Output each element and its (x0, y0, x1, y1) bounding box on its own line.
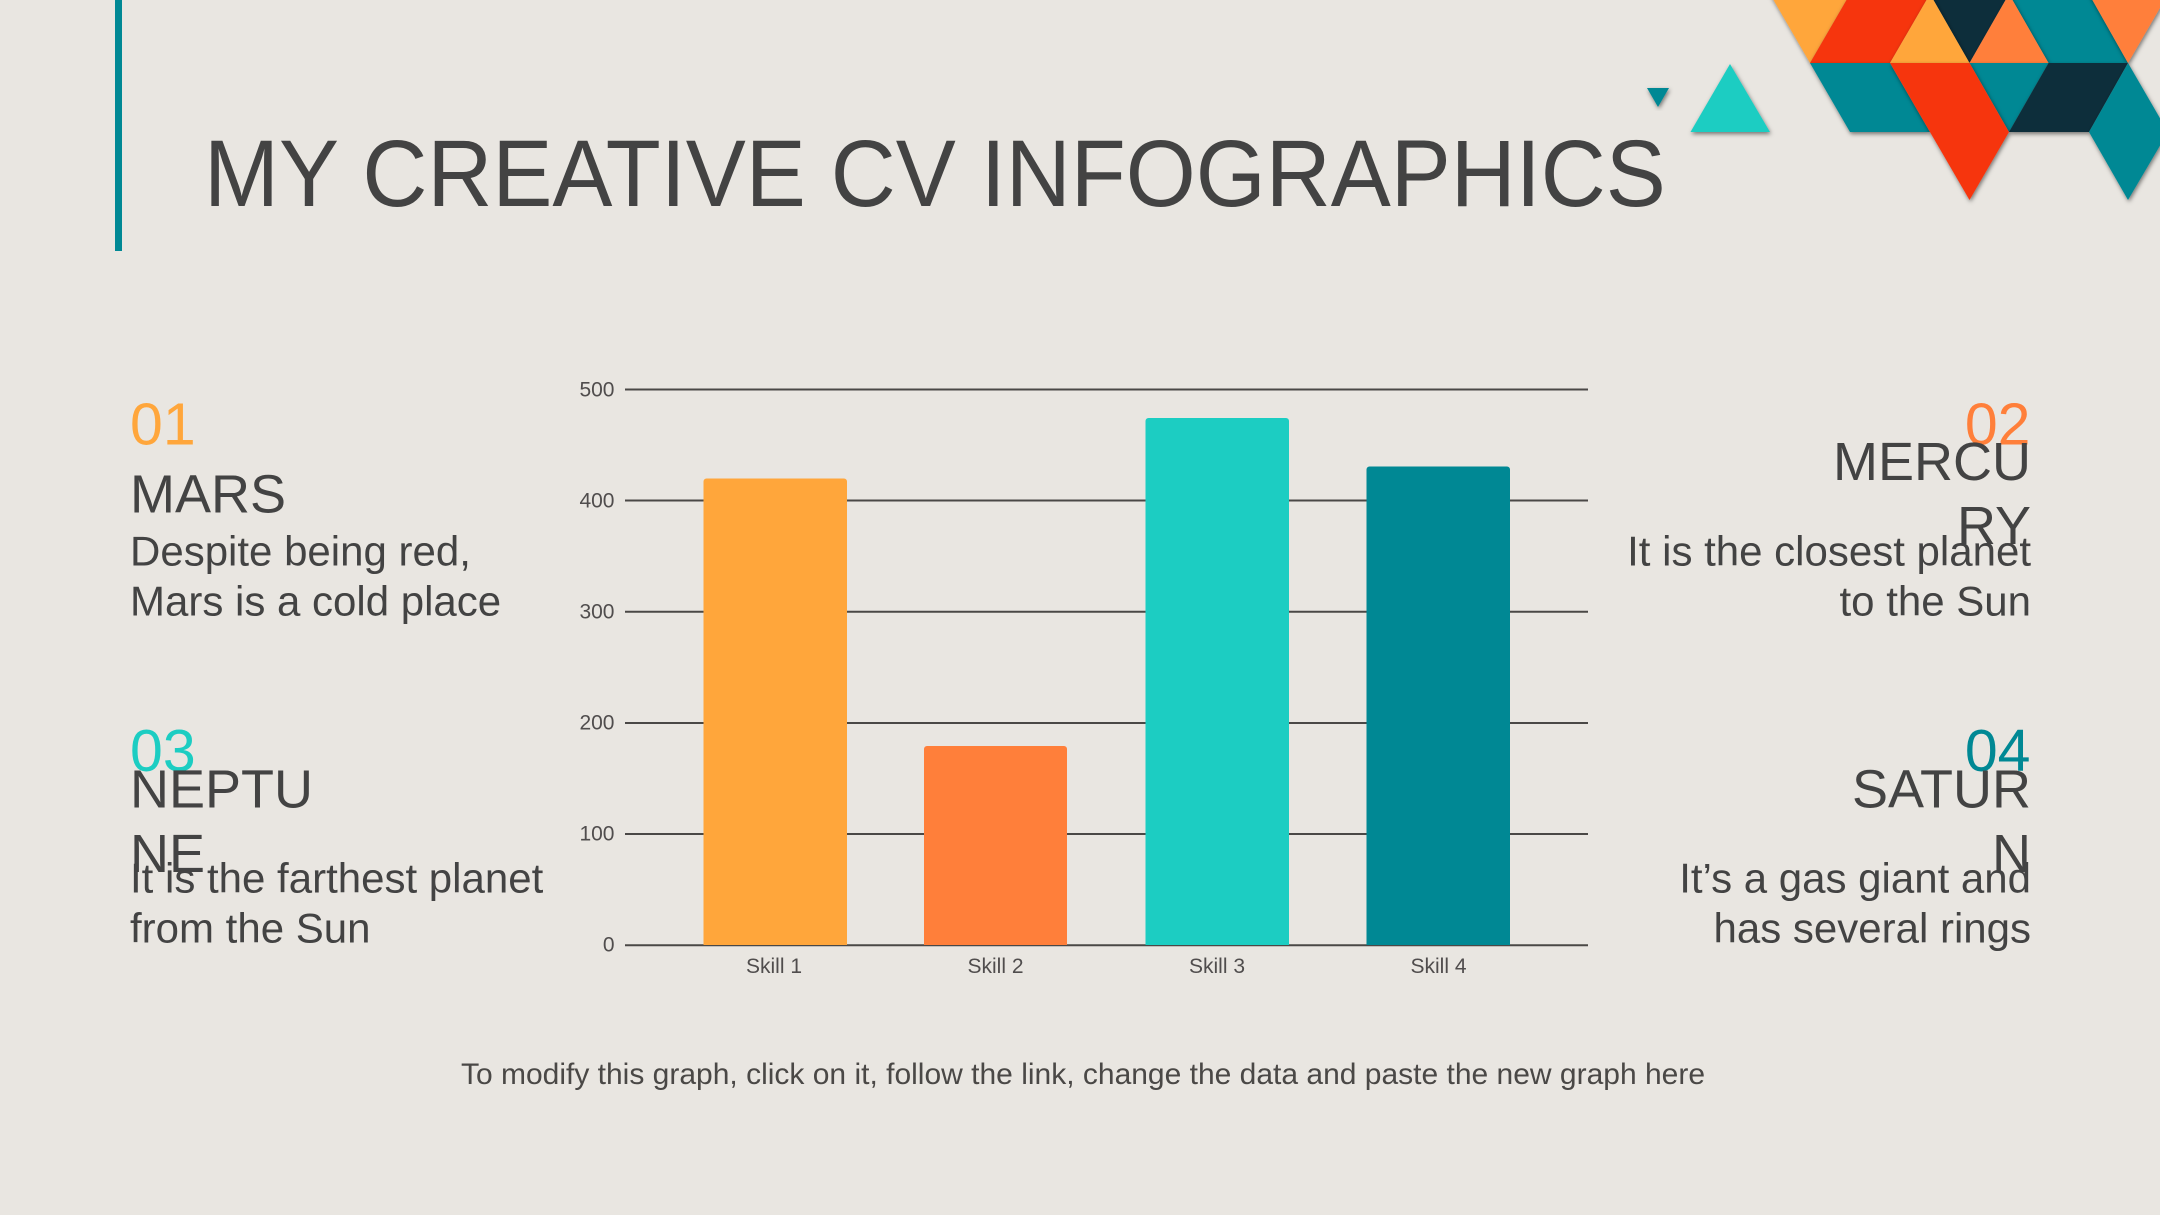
caption: To modify this graph, click on it, follow the link, change the data and paste the new graph here (461, 1058, 1705, 1091)
bar: Skill 4 (1366, 466, 1510, 945)
x axis labels: Skill 2 (967, 955, 1024, 978)
description Neptune: from the Sun (130, 904, 370, 952)
number 01: 01 (130, 392, 196, 458)
icon: cyan triangle (1690, 64, 1770, 132)
bar chart (579, 378, 1588, 978)
y axis labels: 100 (579, 822, 614, 846)
number 02: 02 (1965, 392, 2030, 458)
bar: Skill 3 (1146, 418, 1289, 945)
y axis labels: 300 (579, 600, 614, 624)
bar: Skill 1 (704, 478, 847, 945)
y axis labels: 200 (579, 712, 614, 734)
heading Mercury: MERCU (1833, 432, 2031, 492)
heading Neptune: NE (130, 824, 205, 884)
accent bar (115, 0, 122, 251)
icon: small teal triangle (1647, 88, 1669, 107)
x axis labels: Skill 3 (1189, 955, 1245, 978)
description Saturn: It’s a gas giant and (1679, 854, 2031, 902)
panel: 01 Mars (130, 392, 501, 624)
description Mercury: to the Sun (1840, 578, 2031, 624)
x axis labels: Skill 1 (746, 955, 802, 978)
heading Mercury: RY (1957, 496, 2031, 556)
x axis labels (746, 955, 1467, 978)
triangle mosaic (1770, 0, 2160, 200)
panel: 02 Mercury (1627, 392, 2031, 624)
x axis labels: Skill 4 (1410, 955, 1467, 978)
y axis labels (579, 378, 614, 956)
title: MY CREATIVE CV INFOGRAPHICS (204, 120, 1666, 226)
y axis labels: 500 (579, 378, 614, 402)
description Mars: Mars is a cold place (130, 578, 501, 624)
description Mercury: It is the closest planet (1627, 528, 2031, 574)
y axis labels: 400 (579, 490, 614, 512)
description Saturn: has several rings (1714, 904, 2031, 952)
number 03: 03 (130, 718, 196, 784)
y axis labels: 0 (603, 934, 614, 956)
heading Saturn: N (1992, 824, 2031, 884)
bar: Skill 2 (924, 746, 1067, 945)
description Mars: Despite being red, (130, 528, 471, 574)
panel: 03 Neptune (130, 718, 544, 952)
number 04: 04 (1965, 718, 2030, 784)
panel: 04 Saturn (1679, 718, 2031, 952)
heading Saturn: SATUR (1852, 760, 2031, 820)
description Neptune: It is the farthest planet (130, 854, 544, 902)
heading Neptune: NEPTU (130, 760, 313, 820)
heading Mars: MARS (130, 464, 286, 524)
